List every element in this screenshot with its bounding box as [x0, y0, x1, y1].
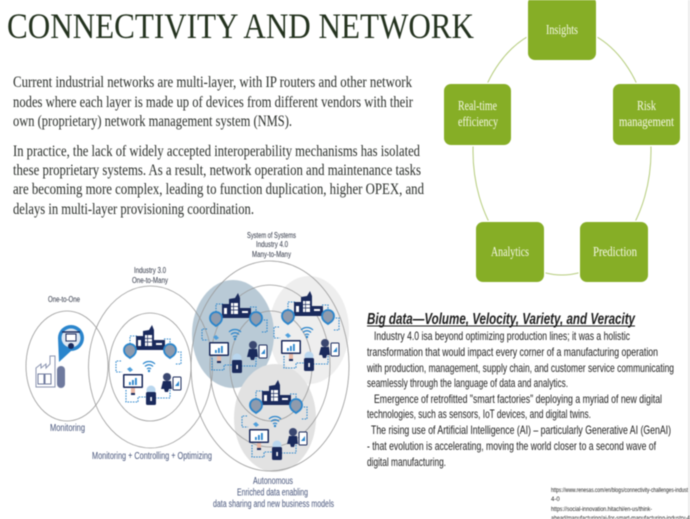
node: Insights: [528, 0, 596, 60]
big data body text: technologies, such as sensors, IoT devices, and digital twins.: [367, 407, 591, 421]
label: One-to-One: One-to-One: [48, 295, 80, 304]
icon cluster: right: [274, 291, 339, 371]
big data body text: digital manufacturing.: [367, 455, 446, 469]
node: Real-time efficiency: [444, 84, 511, 145]
intro paragraph: nodes where each layer is made up of devices from different vendors with their: [13, 94, 414, 111]
node: Risk management: [613, 84, 680, 145]
cycle diagram: [444, 0, 680, 282]
node: Analytics: [476, 222, 544, 282]
node: Analytics: Analytics: [491, 244, 529, 259]
industry evolution diagram: [26, 231, 349, 510]
label: System of Systems: Industry 4.0: [256, 240, 288, 249]
label: Monitoring + Controlling + Optimizing: Monitoring + Controlling + Optimizing: [92, 451, 212, 462]
label: Autonomous: Enriched data enabling: [237, 488, 308, 498]
node: Real-time efficiency: Real-time: [458, 98, 497, 113]
source links: [551, 488, 690, 519]
intro paragraph: [13, 74, 414, 130]
node: Risk management: Risk: [637, 98, 656, 113]
source links: 4-0: [551, 497, 560, 503]
label: Industry 3.0: Industry 3.0: [134, 266, 166, 275]
big data body text: [366, 329, 674, 469]
second paragraph: [13, 143, 424, 218]
outline circles: [26, 261, 349, 471]
label: System of Systems: System of Systems: [247, 231, 296, 240]
label: Industry 3.0: [132, 266, 168, 285]
second paragraph: these proprietary systems. As a result, network operation and maintenance tasks: [13, 162, 421, 179]
label: Industry 3.0: One-to-Many: [132, 276, 168, 285]
right page edge: [688, 0, 690, 519]
node: Prediction: Prediction: [593, 244, 637, 259]
label: System of Systems: [247, 231, 296, 259]
icon cluster: bottom: [242, 380, 307, 460]
node: Prediction: [580, 222, 648, 282]
second paragraph: delays in multi-layer provisioning coordination.: [13, 201, 254, 218]
label: Autonomous: data sharing and new business models: [213, 499, 334, 510]
label: Monitoring: Monitoring: [50, 423, 85, 434]
second paragraph: In practice, the lack of widely accepted interoperability mechanisms has isolated: [13, 143, 420, 160]
icon cluster: Industry 3.0: [116, 325, 181, 405]
intro paragraph: Current industrial networks are multi-layer, with IP routers and other network: [13, 74, 412, 91]
cycle ring: [473, 27, 651, 275]
source links: https://social-innovation.hitachi/en-us/think-: [551, 507, 652, 513]
icon: factory with location pin: [36, 325, 84, 388]
node: Real-time efficiency: efficiency: [458, 114, 498, 129]
label: Autonomous: Autonomous: [253, 476, 293, 487]
big data body text: seamlessly through the language of data and analytics.: [367, 376, 568, 390]
icon cluster: blue: [202, 293, 267, 373]
second paragraph: are becoming more complex, leading to function duplication, higher OPEX, and: [13, 181, 424, 198]
intro paragraph: own (proprietary) network management system (NMS).: [13, 113, 292, 130]
label: System of Systems: Many-to-Many: [252, 250, 291, 259]
title: CONNECTIVITY AND NETWORK: [7, 6, 474, 46]
shaded cluster circles: [192, 276, 349, 472]
node: Risk management: management: [619, 114, 674, 129]
node: Insights: Insights: [546, 22, 578, 37]
label: Autonomous: [213, 476, 334, 510]
